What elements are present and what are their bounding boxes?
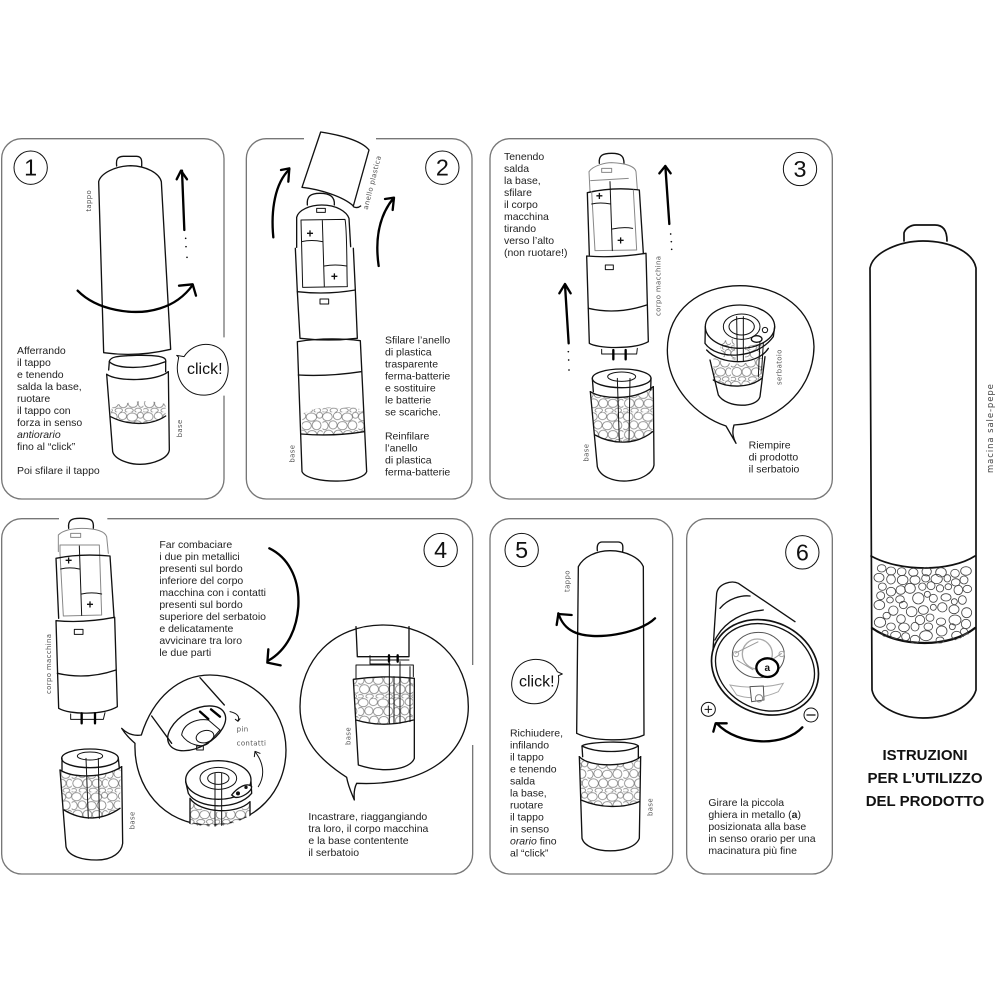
- illustration: exposed batteries and body: +: [331, 269, 338, 283]
- caption: fill the reservoir: di prodotto: [749, 453, 798, 464]
- instructions text: il corpo: [504, 200, 538, 211]
- instructions text: inferiore del corpo: [159, 576, 243, 587]
- instructions text: di plastica: [385, 347, 432, 358]
- illustration: exposed batteries and body: [295, 193, 367, 481]
- instructions text: salda la base,: [17, 382, 82, 393]
- step number 1: 1: [24, 155, 37, 181]
- illustration: grinder base seen from below: [696, 582, 834, 732]
- arrow: up left: [559, 284, 571, 371]
- label: pin: [230, 712, 248, 733]
- step number 3: 3: [794, 156, 806, 182]
- step number 4: 4: [434, 537, 447, 563]
- instructions text: se scariche.: [385, 407, 441, 418]
- illustration: exposed batteries and body: +: [306, 226, 313, 240]
- instructions text: il tappo: [510, 813, 544, 824]
- instructions text: il tappo: [510, 753, 544, 764]
- instructions text: ferma-batterie: [385, 371, 450, 382]
- arrow: rotate: [78, 284, 196, 312]
- panel 2: replace batteries: [246, 132, 472, 499]
- instructions text: le batterie: [385, 395, 431, 406]
- instructions text: ruotare: [510, 801, 543, 812]
- arrow: rotate: [557, 613, 655, 636]
- step number 2: [426, 151, 459, 184]
- panel 5: close the mill: [490, 519, 673, 874]
- title: DEL PRODOTTO: [866, 793, 985, 810]
- speech bubble: reservoir detail: [667, 286, 814, 443]
- instructions text: salda: [504, 164, 529, 175]
- panel 4: match pins and contacts: [2, 518, 473, 874]
- label: anello plastica: anello plastica: [362, 155, 383, 210]
- illustration: base with reservoir: [60, 749, 123, 860]
- caption: snap together: e la base contentente: [308, 836, 409, 847]
- instructions text: avvicinare tra loro: [159, 636, 242, 647]
- caption: fill the reservoir: il serbatoio: [749, 465, 800, 476]
- instructions text: la base,: [504, 176, 541, 187]
- instructions text: Tenendo: [504, 152, 544, 163]
- illustration: machine body: [56, 518, 117, 723]
- speech bubble: click: [512, 659, 562, 704]
- label: tappo: tappo: [85, 190, 93, 212]
- label: base: base: [647, 798, 655, 816]
- speech bubble: pins and contacts: [122, 675, 286, 827]
- instructions text: e tenendo: [510, 765, 557, 776]
- speech bubble: click: [177, 344, 228, 395]
- instructions text: ghiera in metallo (a): [708, 810, 801, 821]
- label: pin: pin: [237, 725, 248, 733]
- illustration: grinder base seen from below: a: [765, 663, 771, 674]
- speech bubble: click: click!: [519, 674, 555, 691]
- instructions text: forza in senso: [17, 418, 82, 429]
- instructions text: Sfilare l’anello: [385, 335, 450, 346]
- arrow: right up: [377, 198, 394, 266]
- instructions text: in senso orario per una: [708, 834, 816, 845]
- illustration: base with reservoir: [590, 369, 654, 481]
- step number 5: [505, 533, 538, 567]
- step number 3: [783, 152, 817, 186]
- instructions text: Afferrando: [17, 346, 66, 357]
- instructions text: Reinfilare: [385, 431, 429, 442]
- caption: snap together: tra loro, il corpo macchina: [308, 824, 429, 835]
- caption: snap together: il serbatoio: [308, 848, 359, 859]
- main product: salt and pepper mill: [870, 225, 976, 718]
- label: corpo macchina: corpo macchina: [45, 634, 53, 694]
- instructions text: superiore del serbatoio: [159, 612, 266, 623]
- caption: snap together: Incastrare, riaggangiando: [308, 812, 427, 823]
- illustration: cap and base: [577, 542, 644, 851]
- instructions text: in senso: [510, 825, 549, 836]
- instructions text: di plastica: [385, 455, 432, 466]
- speech bubble: assembled cross-section: [300, 625, 468, 800]
- instructions text: e sostituire: [385, 383, 436, 394]
- icon: plus: [701, 702, 715, 716]
- instructions text: sfilare: [504, 188, 532, 199]
- label: contatti: [237, 739, 266, 787]
- icon: minus: [804, 708, 818, 722]
- caption: fill the reservoir: Riempire: [749, 441, 791, 452]
- mill outline: [870, 225, 976, 718]
- label: contatti: contatti: [237, 739, 266, 747]
- instructions text: Far combaciare: [159, 540, 232, 551]
- illustration: machine body: +: [86, 598, 93, 612]
- arrow: pull up: [177, 171, 188, 258]
- illustration: cap lifted off the base: [99, 156, 171, 464]
- arrow: turn: [713, 723, 802, 741]
- instructions text: la base,: [510, 789, 547, 800]
- panel 6: adjust the grind: [687, 519, 834, 874]
- instructions text: il tappo: [17, 358, 51, 369]
- pebbles: [874, 565, 972, 643]
- label: base: base: [176, 419, 184, 437]
- illustration: machine body: [587, 153, 648, 359]
- instructions text: (non ruotare!): [504, 248, 568, 259]
- instructions text: verso l’alto: [504, 236, 554, 247]
- instructions text: ferma-batterie: [385, 467, 450, 478]
- instructions text: Poi sfilare il tappo: [17, 466, 100, 477]
- instructions text: presenti sul bordo: [159, 600, 243, 611]
- instructions text: Richiudere,: [510, 729, 563, 740]
- instructions text: l’anello: [385, 443, 418, 454]
- instructions text: macchina con i contatti: [159, 588, 266, 599]
- instructions text: ruotare: [17, 394, 50, 405]
- instructions text: al “click”: [510, 849, 549, 860]
- step number 6: [786, 536, 819, 569]
- step number 6: 6: [796, 539, 809, 565]
- step number 2: 2: [436, 155, 449, 181]
- instructions text: tirando: [504, 224, 536, 235]
- illustration: machine body: +: [596, 189, 603, 203]
- instructions text: presenti sul bordo: [159, 564, 243, 575]
- illustration: machine body: +: [617, 233, 624, 247]
- arrow: bring together: [267, 548, 298, 665]
- instructions text: salda: [510, 777, 535, 788]
- instructions text: infilando: [510, 741, 549, 752]
- panel 3: fill the reservoir: [490, 139, 832, 499]
- label: serbatoio: serbatoio: [776, 349, 784, 385]
- instructions text: il tappo con: [17, 406, 71, 417]
- instructions text: fino al “click”: [17, 442, 76, 453]
- instructions text: e tenendo: [17, 370, 64, 381]
- title: ISTRUZIONI: [882, 747, 968, 764]
- instructions text: antiorario: [17, 430, 61, 441]
- label: base: base: [128, 811, 136, 829]
- instructions text: trasparente: [385, 359, 438, 370]
- step number 4: [424, 533, 457, 567]
- label: base: base: [288, 445, 296, 463]
- instructions text: le due parti: [159, 648, 211, 659]
- instructions text: e delicatamente: [159, 624, 234, 635]
- instructions text: i due pin metallici: [159, 552, 240, 563]
- plastic ring: [302, 132, 369, 208]
- instructions text: orario fino: [510, 837, 557, 848]
- step number 1: [14, 151, 47, 184]
- label: base: base: [582, 444, 590, 462]
- instructions text: macinatura più fine: [708, 846, 797, 857]
- label: macina sale-pepe: macina sale-pepe: [986, 383, 996, 473]
- label: corpo macchina: corpo macchina: [654, 256, 662, 316]
- instructions text: macchina: [504, 212, 549, 223]
- arrow: up right: [659, 166, 672, 250]
- speech bubble: click: click!: [187, 361, 223, 378]
- title: PER L’UTILIZZO: [868, 770, 983, 787]
- step number 5: 5: [515, 537, 528, 563]
- instructions text: posizionata alla base: [708, 822, 806, 833]
- arrow: left up: [273, 168, 289, 237]
- instructions text: Girare la piccola: [708, 798, 784, 809]
- panel 1: remove the cap: [2, 139, 228, 499]
- label: tappo: tappo: [563, 570, 571, 592]
- illustration: machine body: +: [65, 553, 72, 567]
- label: base: base: [344, 727, 352, 745]
